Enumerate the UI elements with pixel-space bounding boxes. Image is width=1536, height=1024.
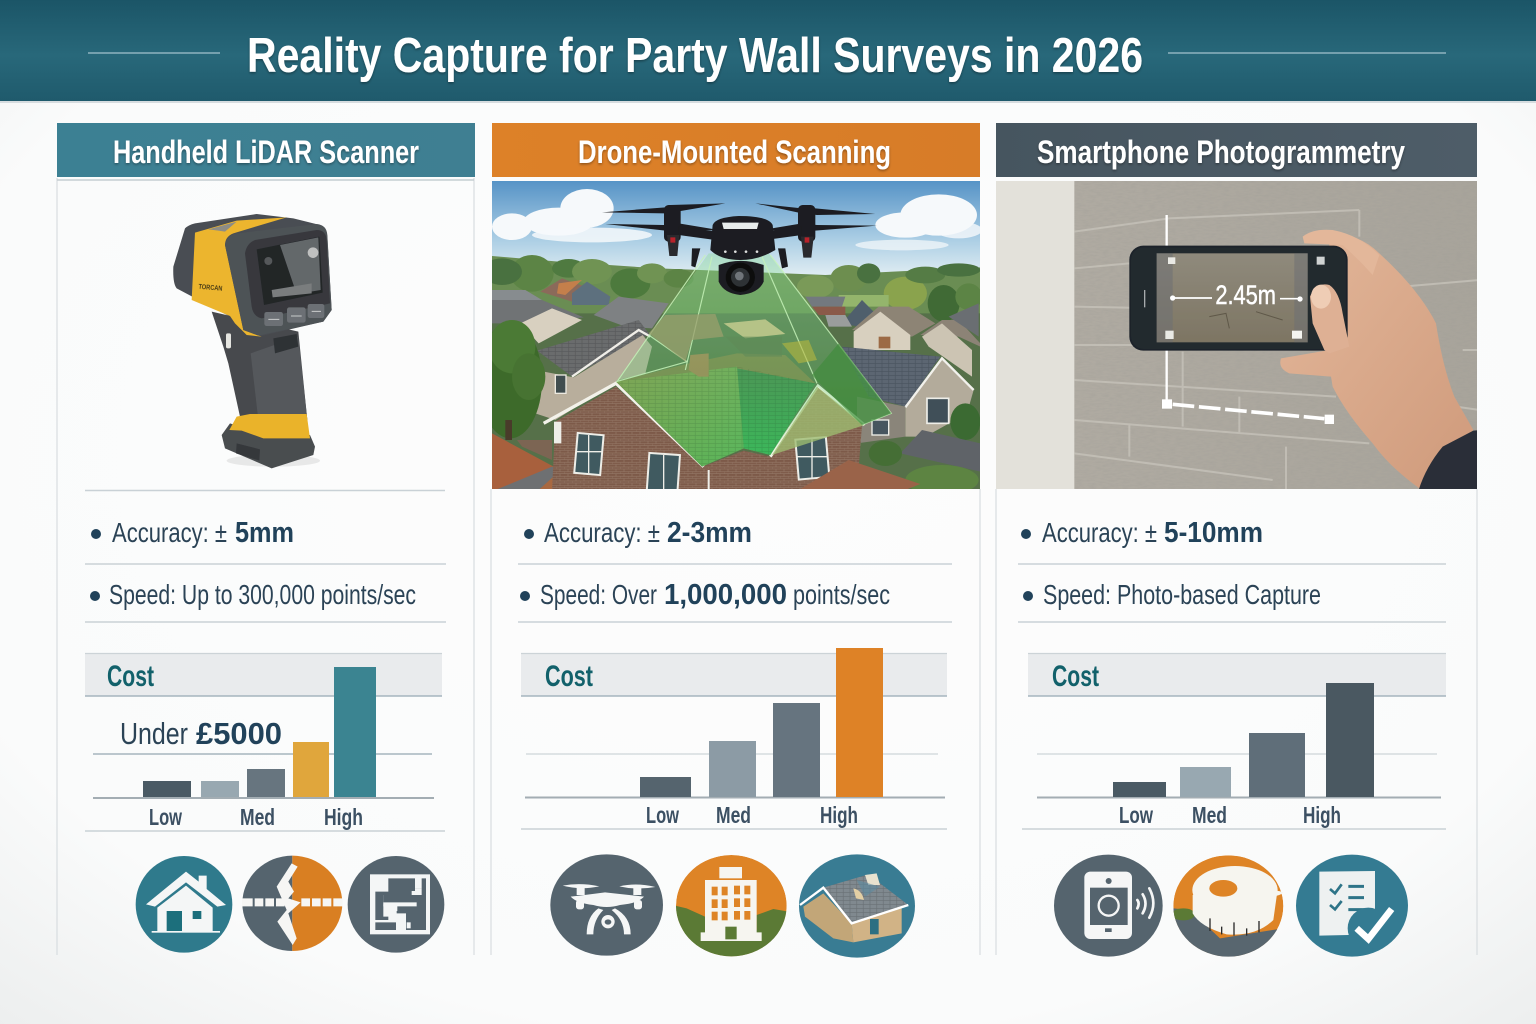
panel: handheld LiDAR scanner xyxy=(57,123,475,955)
cost chart: Low xyxy=(1119,802,1154,828)
cost chart: High xyxy=(324,804,363,830)
drone xyxy=(602,203,877,295)
spec: accuracy xyxy=(1021,517,1263,549)
left houses xyxy=(537,320,649,377)
icon: building xyxy=(676,855,787,956)
icons row: drone, building, roof xyxy=(550,854,915,965)
phone xyxy=(1129,246,1348,351)
thumb and finger xyxy=(1310,284,1349,353)
cost value: Under xyxy=(120,716,188,751)
cost chart: High xyxy=(820,802,858,828)
panel heading: Handheld LiDAR Scanner: Handheld LiDAR Scanner xyxy=(113,134,419,170)
spec: accuracy: 5-10mm xyxy=(1164,517,1263,549)
panel: drone-mounted scanning xyxy=(479,123,982,965)
cost chart: Low xyxy=(149,804,182,830)
spec: speed: points/sec xyxy=(793,579,890,610)
spec: accuracy: Accuracy: ± xyxy=(544,517,660,548)
cost chart xyxy=(85,653,445,831)
icon: drone xyxy=(550,854,663,956)
icon: phone scan xyxy=(1054,855,1163,957)
panel: smartphone photogrammetry xyxy=(996,123,1480,962)
panel heading: Smartphone Photogrammetry xyxy=(996,123,1477,177)
spec: accuracy: Accuracy: ± xyxy=(112,517,227,548)
icon: party wall crack xyxy=(242,856,342,951)
spec: accuracy: 5mm xyxy=(235,517,294,549)
title: Reality Capture for Party Wall Surveys in 2026 xyxy=(247,29,1143,83)
spec: accuracy: 2-3mm xyxy=(667,517,752,549)
panel heading: Drone-Mounted Scanning: Drone-Mounted Scanning xyxy=(578,134,891,170)
sleeve xyxy=(1419,430,1480,490)
cost chart xyxy=(521,648,947,829)
cost chart: Med xyxy=(716,802,751,828)
distant houses xyxy=(540,278,609,302)
cost chart: Low xyxy=(646,802,679,828)
panel heading: Handheld LiDAR Scanner xyxy=(57,123,475,177)
photo: drone scanning rooftops xyxy=(479,180,982,495)
spec: speed xyxy=(520,579,890,611)
panel heading: Drone-Mounted Scanning xyxy=(492,123,980,177)
spec: accuracy xyxy=(524,517,752,549)
spec: speed: 1,000,000 xyxy=(664,579,787,611)
icon: floor plan xyxy=(348,856,444,953)
icon: tape measure xyxy=(1172,855,1283,962)
cost heading: Cost xyxy=(545,660,593,693)
icons row: phone scan, tape measure, checklist xyxy=(1054,855,1408,962)
cost chart xyxy=(1022,653,1446,829)
AR overlay xyxy=(1167,215,1324,419)
cost value xyxy=(120,716,282,751)
photo: smartphone measuring a wall xyxy=(996,180,1480,490)
cost chart: High xyxy=(1303,802,1341,828)
illustration: handheld scanner xyxy=(173,214,332,468)
logo text: TORCAN xyxy=(198,284,223,293)
icons row: house, party wall crack, floor plan xyxy=(136,852,444,955)
cost heading: Cost xyxy=(1052,660,1099,693)
spec: accuracy: Accuracy: ± xyxy=(1042,517,1157,548)
cost chart: Med xyxy=(1192,802,1227,828)
icon: roof xyxy=(799,854,915,958)
scan cone xyxy=(616,253,891,467)
spec: speed: Speed: Over xyxy=(540,579,657,610)
cost chart: Med xyxy=(240,804,275,830)
spec: speed: Speed: Photo-based Capture xyxy=(1043,579,1321,610)
hand back xyxy=(1280,233,1473,488)
measurement readout: 2.45m xyxy=(1215,280,1276,310)
header banner xyxy=(0,0,1536,103)
spec: speed: Speed: Up to 300,000 points/sec xyxy=(109,579,416,610)
panel heading: Smartphone Photogrammetry: Smartphone Photogrammetry xyxy=(1037,134,1405,170)
spec: accuracy xyxy=(91,517,294,549)
icon: checklist xyxy=(1296,855,1408,957)
icon: house xyxy=(136,856,232,953)
cost value: £5000 xyxy=(196,716,282,751)
roof xyxy=(616,353,815,467)
main house xyxy=(552,387,862,490)
cost heading: Cost xyxy=(107,660,154,693)
